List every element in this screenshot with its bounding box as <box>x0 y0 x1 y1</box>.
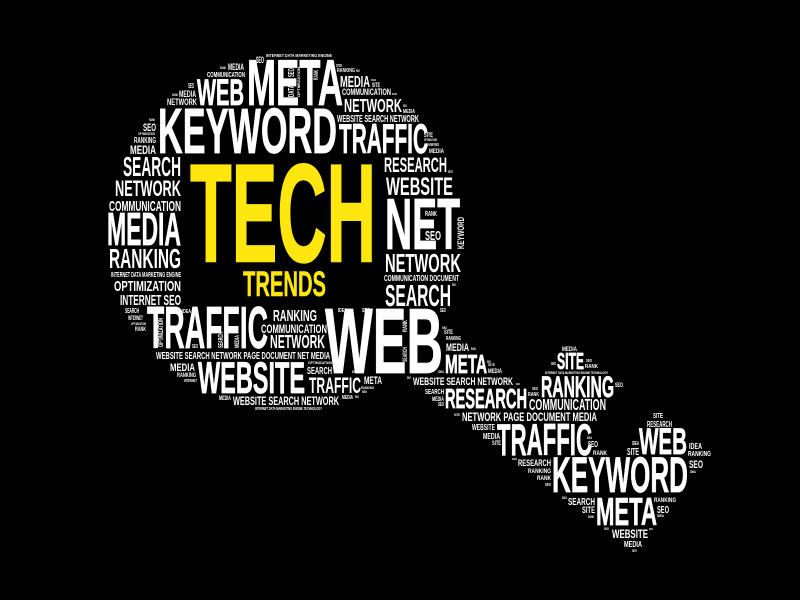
word: WEB handle: WEB <box>639 421 687 462</box>
panel: magnifying glass lens word cloud: SEO <box>256 55 264 65</box>
panel: magnifying glass handle word cloud: SEO <box>516 382 520 386</box>
panel: magnifying glass handle word cloud: IDEA <box>587 435 592 440</box>
panel: magnifying glass lens word cloud: RANKING <box>426 142 439 147</box>
panel: magnifying glass handle word cloud: RANKING <box>528 468 551 475</box>
panel: magnifying glass lens word cloud: SEO <box>403 103 407 108</box>
panel: magnifying glass lens word cloud: MEDIA <box>429 148 444 155</box>
panel: magnifying glass lens word cloud: RANKING <box>361 385 374 390</box>
panel: magnifying glass lens word cloud: RANKING <box>337 68 355 74</box>
panel: magnifying glass handle word cloud <box>407 325 711 553</box>
panel: magnifying glass handle word cloud: RANKING <box>688 449 711 458</box>
word: NET: NET <box>385 185 460 265</box>
panel: magnifying glass handle word cloud: MEDIA <box>488 369 502 375</box>
word: WEB at junction of lens and handle: IDEA <box>352 369 357 374</box>
panel: magnifying glass handle word cloud: WEBSITE <box>472 423 495 432</box>
panel: magnifying glass handle word cloud: SEO <box>487 360 491 364</box>
panel: magnifying glass lens word cloud: RANK <box>220 66 226 70</box>
panel: magnifying glass lens word cloud: WEBSITE SEARCH NETWORK <box>337 114 419 125</box>
word: WEB at junction of lens and handle: SEO <box>440 308 446 314</box>
panel: magnifying glass lens word cloud: MEDIA <box>179 89 196 99</box>
panel: magnifying glass lens word cloud: RANK <box>149 117 155 122</box>
panel: magnifying glass lens word cloud: SEO <box>356 69 360 73</box>
word: META handle: META <box>596 491 657 534</box>
panel: magnifying glass handle word cloud: SEO <box>532 386 538 391</box>
panel: magnifying glass handle word cloud: RANK <box>528 392 539 398</box>
word: WEB at junction of lens and handle: SEARCH <box>402 347 409 362</box>
panel: magnifying glass handle word cloud: SEO <box>649 527 653 531</box>
subheading: TRENDS: TRENDS <box>243 265 326 304</box>
panel: magnifying glass lens word cloud: NETWORK <box>344 96 402 116</box>
panel: magnifying glass lens word cloud: MEDIA <box>170 362 195 374</box>
panel: magnifying glass lens word cloud: MEDIA <box>403 109 415 115</box>
title: TECH TRENDS <box>190 134 376 304</box>
panel: magnifying glass handle word cloud: SEO <box>604 526 609 531</box>
panel: magnifying glass handle word cloud: INTERNET DATA MARKETING ENGINE TECHNOLOGY <box>545 371 608 375</box>
panel: magnifying glass lens word cloud: RANKING <box>273 308 317 325</box>
panel: magnifying glass handle word cloud: SEO <box>407 376 411 380</box>
panel: magnifying glass lens word cloud: IDEA <box>182 309 191 315</box>
panel: magnifying glass lens word cloud: DATA <box>287 85 296 97</box>
panel: magnifying glass handle word cloud: WEBSITE SEARCH NETWORK <box>413 376 513 388</box>
panel: magnifying glass lens word cloud: SITE <box>372 83 380 89</box>
word: KEYWORD: KEYWORD <box>158 95 337 167</box>
panel: magnifying glass lens word cloud: COMMUNICATION DOCUMENT <box>384 274 459 283</box>
panel: magnifying glass lens word cloud: MEDIA <box>342 395 353 401</box>
panel: magnifying glass lens word cloud: OPTIMIZATION <box>114 278 181 295</box>
panel: magnifying glass lens word cloud: MEDIA <box>107 203 181 255</box>
panel: magnifying glass handle word cloud: RANK <box>537 475 551 482</box>
panel: magnifying glass lens word cloud: SEO <box>143 122 156 134</box>
panel: magnifying glass lens word cloud: SEARCH <box>307 366 332 377</box>
word: WEB at junction of lens and handle: SEO <box>362 308 370 314</box>
panel: magnifying glass handle word cloud: SITE <box>632 548 637 553</box>
panel: magnifying glass lens word cloud: NETWORK <box>385 248 461 278</box>
panel: magnifying glass lens word cloud: RANK <box>392 92 397 96</box>
panel: magnifying glass lens word cloud: TRAFFIC <box>147 295 268 361</box>
panel: magnifying glass handle word cloud: RESEARCH <box>518 458 551 468</box>
panel: magnifying glass lens word cloud: COMMUNICATION <box>109 198 181 215</box>
panel: magnifying glass lens word cloud: INTERNET DATA MARKETING ENGINE <box>266 53 332 58</box>
panel: magnifying glass lens word cloud: INTERNET SEO <box>120 292 181 309</box>
word: WEBSITE: WEBSITE <box>198 354 305 403</box>
panel: magnifying glass lens word cloud: SEO <box>287 68 296 77</box>
panel: magnifying glass lens word cloud: OPTIMIZATION <box>138 131 155 136</box>
panel: magnifying glass lens word cloud: OPTIMIZATION <box>158 318 165 347</box>
panel: magnifying glass lens word cloud: SITE <box>336 63 342 68</box>
panel: magnifying glass lens word cloud: OPTIMIZATION <box>424 138 437 142</box>
panel: magnifying glass handle word cloud: RANK <box>593 450 607 457</box>
panel: magnifying glass lens word cloud: OPTIMIZATION <box>131 321 146 326</box>
panel: magnifying glass lens word cloud: INTERNET DATA MARKETING ENGINE TECHNOLOGY <box>255 406 322 411</box>
panel: magnifying glass lens word cloud: COMMUNICATION <box>261 322 327 336</box>
word: META middle: META <box>445 349 487 379</box>
panel: magnifying glass lens word cloud: OPTIMIZATION <box>296 67 301 97</box>
panel: magnifying glass lens word cloud: WEBSITE SEARCH NETWORK <box>233 394 339 408</box>
word: WEB at junction of lens and handle: IDEA <box>338 308 347 314</box>
panel: magnifying glass handle word cloud: WEBSITE <box>612 527 648 541</box>
panel: magnifying glass lens word cloud: COMMUNICATION <box>207 70 245 79</box>
panel: magnifying glass handle word cloud: RANK <box>471 347 476 351</box>
panel: magnifying glass lens word cloud: RANK <box>135 327 146 333</box>
panel: magnifying glass handle word cloud: MEDIA <box>483 432 500 441</box>
panel: magnifying glass lens word cloud: META <box>364 375 382 387</box>
word: WEB at junction of lens and handle: RANK <box>402 320 409 332</box>
panel: magnifying glass lens word cloud: SITE <box>448 170 453 174</box>
panel: magnifying glass lens word cloud: RANKING <box>109 243 181 274</box>
panel: magnifying glass lens word cloud: TRAFFIC <box>309 373 361 398</box>
panel: magnifying glass lens word cloud: MEDIA <box>228 62 244 72</box>
panel: magnifying glass handle word cloud: SEO <box>512 457 518 461</box>
panel: magnifying glass handle word cloud: RANK <box>588 515 594 519</box>
panel: magnifying glass handle word cloud: SEO <box>657 505 669 516</box>
panel: magnifying glass lens word cloud: COMMUNICATION <box>342 87 391 97</box>
panel: magnifying glass lens word cloud: KEYWORD <box>456 217 466 249</box>
panel: magnifying glass handle word cloud: IDEA <box>690 469 696 474</box>
panel: magnifying glass lens word cloud: SEARCH <box>385 278 451 313</box>
panel: magnifying glass lens word cloud: NETWORK <box>115 176 181 201</box>
panel: magnifying glass lens word cloud: NETWORK <box>270 332 325 352</box>
word: TRAFFIC upper right: TRAFFIC <box>339 115 428 162</box>
panel: magnifying glass lens word cloud: MEDIA <box>219 396 231 402</box>
panel: magnifying glass handle word cloud: SEO <box>551 361 556 366</box>
panel: magnifying glass handle word cloud: TRAFFIC <box>497 416 592 465</box>
panel: magnifying glass handle word cloud: MEDIA <box>432 397 444 403</box>
panel: magnifying glass handle word cloud: IDEA <box>657 513 664 518</box>
panel: magnifying glass handle word cloud: SITE <box>444 330 453 336</box>
panel: magnifying glass lens word cloud: RANK <box>371 78 376 82</box>
panel: magnifying glass handle word cloud: SITE <box>627 447 639 458</box>
panel: magnifying glass lens word cloud: MEDIA <box>130 145 156 157</box>
panel: magnifying glass lens word cloud: RANKING <box>177 372 196 379</box>
panel: magnifying glass handle word cloud: IDEA <box>689 442 702 451</box>
panel: magnifying glass handle word cloud: SEO <box>438 402 444 408</box>
panel: magnifying glass lens word cloud: SEO <box>355 395 359 399</box>
panel: magnifying glass handle word cloud: SITE <box>454 412 460 417</box>
panel: magnifying glass handle word cloud: MEDIA <box>446 342 469 354</box>
panel: magnifying glass handle word cloud: SITE <box>488 362 495 367</box>
panel: magnifying glass lens word cloud <box>107 46 466 411</box>
panel: magnifying glass lens word cloud: SITE <box>424 133 433 139</box>
panel: magnifying glass lens word cloud: SEO <box>362 390 367 394</box>
word: RESEARCH: RESEARCH <box>445 383 527 414</box>
panel: magnifying glass handle word cloud: RANKING <box>654 497 676 504</box>
panel: magnifying glass handle word cloud: IDEA <box>562 495 567 500</box>
panel: magnifying glass handle word cloud: SEO <box>588 440 598 449</box>
panel: magnifying glass handle word cloud: SEO <box>442 325 447 330</box>
panel: magnifying glass handle word cloud: IDEA <box>632 441 639 447</box>
panel: magnifying glass handle word cloud: MEDIA <box>624 540 642 549</box>
panel: magnifying glass handle word cloud: SEO <box>586 358 592 363</box>
panel: magnifying glass handle word cloud: MEDIA <box>562 347 578 353</box>
panel: magnifying glass lens word cloud: WEBSITE SEARCH NETWORK PAGE DOCUMENT NET MEDIA <box>156 351 330 362</box>
panel: magnifying glass handle word cloud: SITE <box>492 441 501 447</box>
panel: magnifying glass lens word cloud: SEO <box>192 344 198 350</box>
panel: magnifying glass handle word cloud: IDEA <box>438 369 444 374</box>
panel: magnifying glass lens word cloud: INTERNET <box>184 378 197 383</box>
panel: magnifying glass handle word cloud: SITE <box>653 413 663 420</box>
infographic: magnifying glass word cloud: TECH <box>190 134 376 292</box>
panel: magnifying glass handle word cloud: RANK <box>585 364 598 370</box>
word: WEB: WEB <box>197 72 244 113</box>
panel: magnifying glass handle word cloud: COMMUNICATION <box>529 397 606 414</box>
panel: magnifying glass handle word cloud: SEARCH <box>568 497 595 508</box>
panel: magnifying glass handle word cloud: SEO <box>545 482 551 487</box>
panel: magnifying glass lens word cloud: SEARCH <box>123 151 181 182</box>
panel: magnifying glass lens word cloud: RANKING <box>134 136 156 145</box>
panel: magnifying glass lens word cloud: MEDIA <box>340 74 370 91</box>
panel: magnifying glass lens word cloud: RANK <box>314 70 320 80</box>
word: WEB at junction of lens and handle <box>325 289 446 393</box>
word: META: META <box>247 46 343 119</box>
word: WEB at junction of lens and handle: WEB <box>325 289 443 393</box>
panel: magnifying glass lens word cloud: NETWORK <box>167 97 197 107</box>
panel: magnifying glass lens word cloud: SEARCH <box>218 332 225 348</box>
panel: magnifying glass lens word cloud: SEO <box>452 283 456 287</box>
panel: magnifying glass lens word cloud: MEDIA <box>235 335 241 348</box>
panel: magnifying glass handle word cloud: RESEARCH <box>647 420 672 429</box>
panel: magnifying glass lens word cloud: WEBSITE <box>386 173 453 201</box>
panel: magnifying glass handle word cloud: SEARCH <box>425 389 444 396</box>
panel: magnifying glass lens word cloud: RESEARCH <box>384 153 447 177</box>
panel: magnifying glass handle word cloud: SEO <box>689 459 703 471</box>
word: SITE: SITE <box>557 348 584 374</box>
panel: magnifying glass handle word cloud: NETWORK PAGE DOCUMENT MEDIA <box>462 410 597 424</box>
panel: magnifying glass lens word cloud: RANK <box>425 211 437 218</box>
panel: magnifying glass lens word cloud: INTERNET DATA MARKETING ENGINE <box>111 272 181 279</box>
panel: magnifying glass lens word cloud: INTERNET <box>128 316 143 322</box>
panel: magnifying glass handle word cloud: SEO <box>615 383 623 389</box>
word: WEB at junction of lens and handle: MEDIA <box>379 360 385 372</box>
panel: magnifying glass lens word cloud: SEARCH <box>125 308 139 315</box>
panel: magnifying glass lens word cloud: RANK <box>172 93 178 97</box>
panel: magnifying glass handle word cloud: RANKING <box>446 336 461 342</box>
word: RANKING: RANKING <box>541 371 614 404</box>
panel: magnifying glass lens word cloud: SEO <box>425 228 441 243</box>
panel: magnifying glass lens word cloud: SEO <box>188 83 194 90</box>
panel: magnifying glass handle word cloud: SITE <box>582 505 595 515</box>
panel: magnifying glass lens word cloud: OPTIMIZATION <box>308 360 332 365</box>
